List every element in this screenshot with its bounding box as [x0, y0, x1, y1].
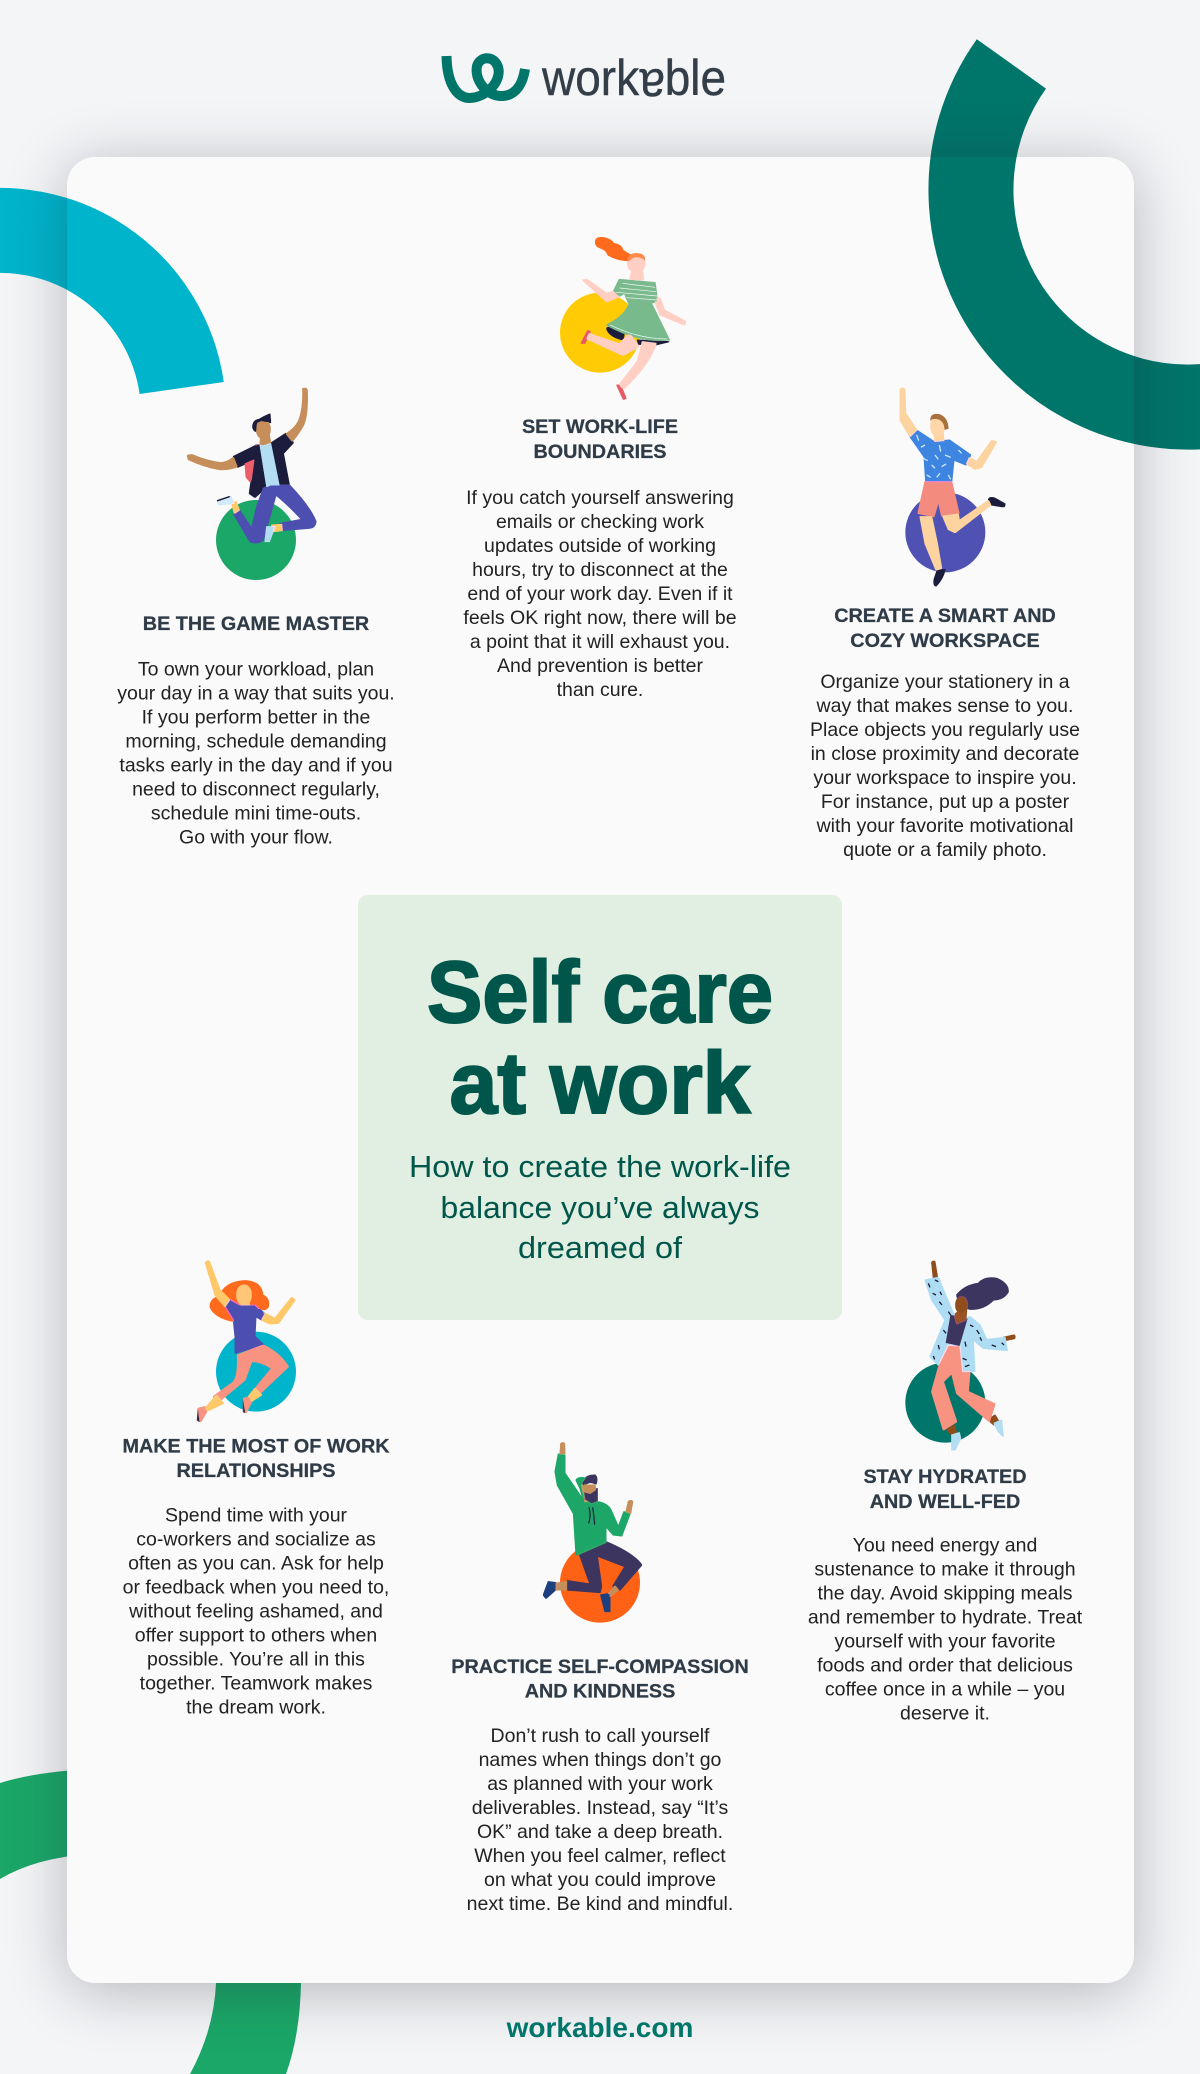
body text: emails or checking work	[496, 511, 704, 533]
subtitle: How to create the work-life	[409, 1149, 791, 1184]
body text: tasks early in the day and if you	[119, 754, 393, 776]
logo mark	[442, 53, 530, 103]
body text: You need energy and	[853, 1534, 1037, 1556]
body text: Place objects you regularly use	[810, 719, 1080, 741]
body text: in close proximity and decorate	[811, 743, 1079, 765]
heading	[863, 1466, 1027, 1513]
body text: feels OK right now, there will be	[463, 607, 737, 629]
body text	[123, 1504, 389, 1718]
body text: Spend time with your	[165, 1504, 348, 1526]
arcs over card	[67, 157, 1134, 444]
body text	[808, 1534, 1083, 1724]
body text: and remember to hydrate. Treat	[808, 1606, 1083, 1628]
subtitle	[409, 1149, 791, 1265]
subtitle: balance you’ve always	[440, 1190, 760, 1225]
body text: next time. Be kind and mindful.	[467, 1893, 733, 1915]
subtitle: dreamed of	[518, 1230, 682, 1265]
title: at work	[450, 1035, 751, 1132]
arc: teal top right	[971, 64, 1200, 407]
heading: BE THE GAME MASTER	[143, 613, 369, 635]
illustration: woman in green dress over yellow circle	[560, 237, 686, 399]
body text: deserve it.	[900, 1702, 990, 1724]
body text	[117, 658, 395, 848]
heading: COZY WORKSPACE	[850, 630, 1040, 652]
body text: together. Teamwork makes	[140, 1672, 373, 1694]
body text: foods and order that delicious	[817, 1654, 1073, 1676]
panel: practice self-compassion and kindness	[451, 1443, 749, 1915]
body text: Don’t rush to call yourself	[491, 1725, 710, 1747]
heading: AND WELL-FED	[870, 1491, 1020, 1513]
panel: be the game master	[117, 388, 395, 848]
body text: often as you can. Ask for help	[128, 1552, 384, 1574]
body text: the dream work.	[186, 1696, 326, 1718]
body text: on what you could improve	[484, 1869, 716, 1891]
body text: Organize your stationery in a	[820, 671, 1070, 693]
heading: STAY HYDRATED	[863, 1466, 1027, 1488]
heading: CREATE A SMART AND	[834, 605, 1056, 627]
body text: names when things don’t go	[479, 1749, 722, 1771]
body text: sustenance to make it through	[814, 1558, 1076, 1580]
body text: When you feel calmer, reflect	[474, 1845, 726, 1867]
body text: or feedback when you need to,	[123, 1576, 389, 1598]
title: Self care	[427, 944, 773, 1041]
body text: deliverables. Instead, say “It’s	[472, 1797, 729, 1819]
heading: SET WORK-LIFE	[522, 416, 678, 438]
heading: MAKE THE MOST OF WORK	[122, 1436, 390, 1458]
illustration: woman in patterned jacket over teal circle	[905, 1261, 1015, 1450]
body text: without feeling ashamed, and	[128, 1600, 383, 1622]
heading: PRACTICE SELF-COMPASSION	[451, 1656, 749, 1678]
body text	[467, 1725, 733, 1915]
heading	[834, 605, 1056, 652]
body text: And prevention is better	[497, 655, 703, 677]
heading: AND KINDNESS	[525, 1680, 675, 1702]
body text: hours, try to disconnect at the	[472, 559, 728, 581]
body text: need to disconnect regularly,	[132, 778, 380, 800]
body text: If you perform better in the	[142, 706, 370, 728]
body text: quote or a family photo.	[843, 839, 1047, 861]
body text: To own your workload, plan	[138, 658, 374, 680]
arc: cyan top left	[0, 230, 182, 388]
body text: Go with your flow.	[179, 826, 333, 848]
logo wordmark: a	[639, 59, 665, 115]
body text: end of your work day. Even if it	[467, 583, 733, 605]
heading	[122, 1436, 390, 1482]
body text	[463, 487, 737, 701]
heading: BOUNDARIES	[534, 441, 666, 463]
panel: set work-life boundaries	[463, 237, 737, 701]
body text: possible. You’re all in this	[147, 1648, 365, 1670]
body text: your workspace to inspire you.	[813, 767, 1077, 789]
body text: offer support to others when	[135, 1624, 377, 1646]
panel: title box	[358, 895, 842, 1320]
illustration: red-haired woman over cyan circle	[197, 1261, 296, 1422]
body text: the day. Avoid skipping meals	[817, 1582, 1073, 1604]
heading	[522, 416, 678, 463]
body text: updates outside of working	[484, 535, 716, 557]
body text: OK” and take a deep breath.	[477, 1821, 723, 1843]
panel: stay hydrated and well-fed	[808, 1261, 1083, 1724]
heading: RELATIONSHIPS	[176, 1460, 336, 1482]
body text: coffee once in a while – you	[825, 1678, 1065, 1700]
body text: than cure.	[557, 679, 643, 701]
body text: schedule mini time-outs.	[151, 802, 361, 824]
body text: morning, schedule demanding	[125, 730, 387, 752]
body text: way that makes sense to you.	[816, 695, 1073, 717]
arc: green bottom left	[0, 1769, 301, 2074]
panel: make the most of work relationships	[122, 1261, 390, 1718]
illustration: man in blue shirt over purple circle	[900, 388, 1005, 586]
body text: a point that it will exhaust you.	[470, 631, 730, 653]
panel: main card	[67, 157, 1134, 1983]
body text: For instance, put up a poster	[821, 791, 1070, 813]
logo wordmark: work ble	[542, 50, 726, 106]
body text: with your favorite motivational	[816, 815, 1073, 837]
heading	[451, 1656, 749, 1702]
illustration: bearded man in green hoodie over orange circle	[543, 1443, 642, 1623]
illustration: man in black jacket over green circle	[187, 388, 316, 580]
footer link text: workable.com	[506, 2012, 693, 2043]
body text: If you catch yourself answering	[466, 487, 734, 509]
body text	[810, 671, 1080, 861]
body text: co-workers and socialize as	[136, 1528, 376, 1550]
body text: your day in a way that suits you.	[117, 682, 395, 704]
title	[427, 944, 773, 1132]
body text: as planned with your work	[487, 1773, 713, 1795]
panel: create a smart and cozy workspace	[810, 388, 1080, 861]
body text: yourself with your favorite	[834, 1630, 1056, 1652]
